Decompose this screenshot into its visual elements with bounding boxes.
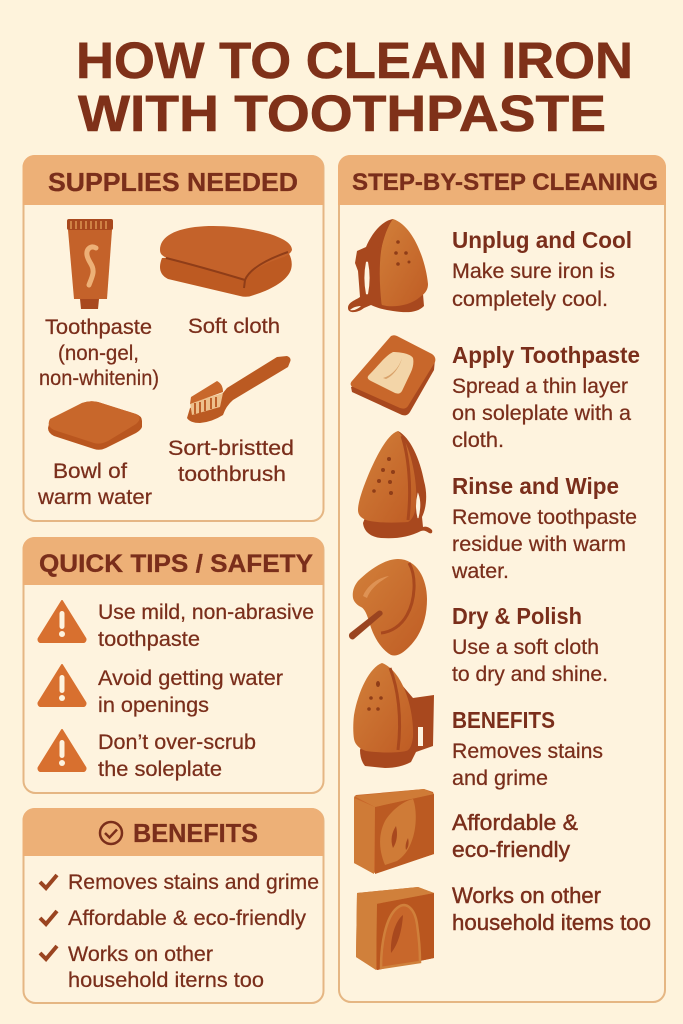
step 5 text: benefits: Removes stains [452, 739, 603, 763]
step 4 text [452, 603, 608, 686]
step 2 text: Apply Toothpaste [452, 342, 640, 368]
benefits header [22, 808, 324, 856]
step 6 text: Affordable & [452, 810, 578, 835]
tip 1 text: toothpaste [98, 627, 200, 651]
step 3 text: residue with warm [452, 532, 626, 556]
label: toothpaste: Toothpaste [45, 315, 152, 339]
steps header [338, 155, 666, 205]
label: soft cloth: Soft cloth [188, 314, 280, 338]
step 4 text: to dry and shine. [452, 662, 608, 686]
label: bowl of warm water: Bowl of [53, 459, 127, 483]
quick tips header: QUICK TIPS / SAFETY [39, 550, 313, 578]
icon: iron 4 polishing [349, 559, 427, 656]
supplies header: SUPPLIES NEEDED [48, 167, 298, 197]
step 1 text: Make sure iron is [452, 259, 615, 283]
tip 3 text [98, 730, 256, 781]
icon: iron 2 with toothpaste [351, 335, 435, 415]
icon: warning triangle 2 [39, 665, 85, 706]
step 1 text: Unplug and Cool [452, 227, 632, 253]
icon: iron 5 [353, 663, 434, 768]
icon: toothbrush [187, 356, 291, 423]
step 2 text: cloth. [452, 428, 504, 452]
tip 2 text: in openings [98, 693, 209, 717]
step 7 text: household items too [452, 910, 651, 935]
icon: iron 3 [358, 431, 432, 538]
benefit 3 [40, 942, 264, 992]
benefit 3: Works on other [68, 942, 213, 966]
benefit 2: Affordable & eco-friendly [68, 906, 306, 930]
step 3 text: Rinse and Wipe [452, 473, 619, 499]
supplies header [22, 155, 324, 205]
icon: soft cloth [160, 226, 292, 297]
label: toothpaste [39, 315, 159, 390]
label: toothbrush [168, 436, 294, 486]
benefits header: BENEFITS [133, 818, 258, 848]
label: toothbrush: toothbrush [178, 462, 286, 486]
step 2 text: on soleplate with a [452, 401, 631, 425]
title: WITH TOOTHPASTE [78, 85, 606, 142]
title [76, 32, 633, 142]
panel: benefits [22, 808, 324, 1003]
icon: toothpaste tube [67, 219, 113, 309]
label: bowl of warm water: warm water [37, 485, 152, 509]
icon: box with iron shape [356, 887, 434, 970]
benefit 3: household iterns too [68, 968, 264, 992]
tip 2 text [98, 666, 283, 717]
step 5 text: benefits: and grime [452, 766, 548, 790]
tip 3 text: Don’t over-scrub [98, 730, 256, 754]
label: toothbrush: Sort-bristted [168, 436, 294, 460]
step 7 text [452, 883, 651, 935]
step 4 text: Dry & Polish [452, 603, 582, 629]
quick tips header [22, 537, 324, 585]
panel: step-by-step cleaning [338, 155, 666, 1002]
tip 3 text: the soleplate [98, 757, 222, 781]
icon: bowl [48, 401, 142, 450]
icon: warning triangle 3 [39, 730, 85, 771]
panel: quick tips and safety [22, 537, 324, 793]
step 5 text: benefits [452, 707, 603, 790]
label: bowl of warm water [37, 459, 152, 509]
step 3 text [451, 473, 637, 583]
icon: iron 1 [348, 219, 428, 312]
step 3 text: Remove toothpaste [452, 505, 637, 529]
step 6 text: eco-friendly [452, 837, 570, 862]
step 2 text: Spread a thin layer [452, 374, 628, 398]
step 7 text: Works on other [452, 883, 601, 908]
steps header: STEP-BY-STEP CLEANING [352, 169, 658, 196]
step 1 text: completely cool. [452, 287, 608, 311]
tip 2 text: Avoid getting water [98, 666, 283, 690]
step 6 text [452, 810, 578, 862]
benefit 1: Removes stains and grime [68, 870, 319, 894]
tip 1 text [98, 600, 314, 651]
panel: supplies needed [22, 155, 324, 521]
step 1 text [452, 227, 632, 311]
tip 1 text: Use mild, non-abrasive [98, 600, 314, 624]
icon: warning triangle 1 [38, 601, 86, 642]
step 5 text: benefits: BENEFITS [452, 707, 555, 733]
step 2 text [452, 342, 640, 452]
icon: box with leaf [354, 789, 434, 874]
step 3 text: water. [451, 559, 509, 583]
label: toothpaste: non-whitenin) [39, 366, 159, 390]
label: toothpaste: (non-gel, [58, 341, 139, 365]
step 4 text: Use a soft cloth [452, 635, 599, 659]
title: HOW TO CLEAN IRON [76, 32, 633, 89]
